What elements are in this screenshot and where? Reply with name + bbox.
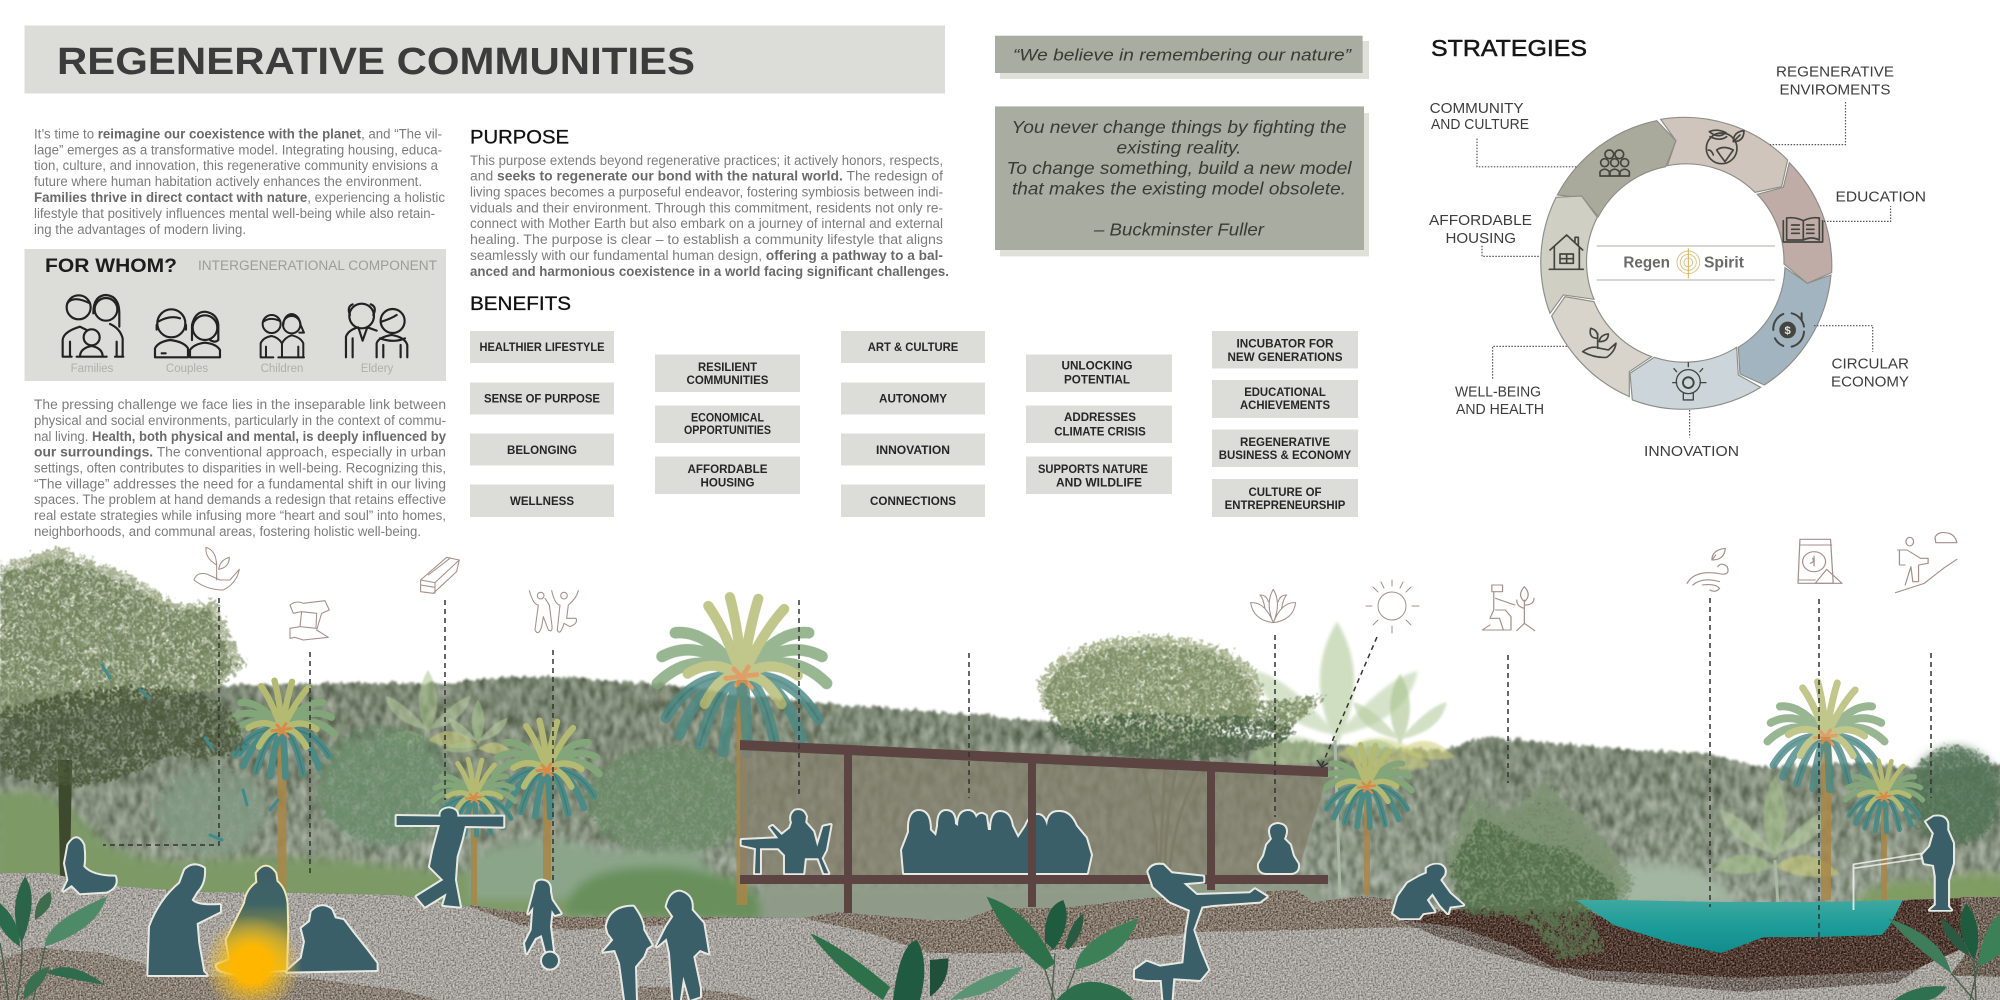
benefits heading: BENEFITS — [470, 293, 571, 315]
benefit tile: innovation — [841, 434, 985, 466]
icon: hand holding sprout — [194, 547, 239, 590]
gravel ground — [0, 873, 2000, 1000]
segment: education — [1757, 163, 1832, 283]
elderly label: Eldery — [361, 363, 394, 375]
strategy labels: COMMUNITY — [1430, 100, 1524, 117]
segment: circular economy — [1738, 268, 1831, 385]
benefit tile: economical opportunities — [655, 406, 800, 443]
benefit tile: economical opportunities: OPPORTUNITIES — [684, 425, 771, 437]
icon: gardener — [1482, 585, 1535, 631]
purpose text block — [470, 153, 949, 279]
wheel centre logo: Regen — [1623, 255, 1670, 272]
for whom heading: FOR WHOM? — [45, 256, 177, 277]
benefit tile: addresses climate crisis: CLIMATE CRISIS — [1054, 426, 1146, 438]
icon: circular dollar — [1773, 313, 1804, 347]
canopy tree behind pergola — [1038, 636, 1325, 868]
benefit tile: innovation: INNOVATION — [876, 445, 950, 457]
purpose text block: viduals and their environment. Through this commitment, residents not only re- — [470, 200, 943, 216]
benefit tile: belonging — [470, 434, 614, 466]
benefit tile: educational achievements — [1212, 380, 1358, 418]
strategy labels: ECONOMY — [1831, 374, 1909, 390]
plants in the soil — [1470, 899, 1605, 960]
quote box: Buckminster Fuller: You never change things by fighting the — [1012, 117, 1347, 137]
challenge text block: physical and social environments, particularly in the context of commu- — [34, 413, 446, 428]
benefit tile: supports nature and wildlife — [1026, 456, 1172, 494]
dashed leader lines — [103, 598, 1931, 955]
benefit tile: healthier lifestyle: HEALTHIER LIFESTYLE — [480, 342, 605, 354]
intro text block — [34, 126, 445, 237]
challenge text block: nal living. Health, both physical and mental, is deeply influenced by — [34, 429, 446, 444]
figure: person carrying log — [397, 808, 503, 907]
benefit tile: affordable housing: AFFORDABLE — [688, 464, 768, 476]
benefit tile: addresses climate crisis — [1026, 406, 1172, 443]
quote box: Buckminster Fuller: existing reality. — [1116, 138, 1242, 158]
benefit tile: resilient communities — [655, 354, 800, 392]
irrigation pole — [1853, 853, 1922, 910]
children figures — [525, 881, 708, 1000]
strategies heading: STRATEGIES — [1431, 35, 1587, 61]
intro text block: tion, culture, and innovation, this regenerative community envisions a — [34, 158, 438, 173]
figure: boy running — [657, 892, 708, 1000]
pergola glass pane — [740, 745, 1328, 875]
intro text block: future where human habitation actively enhances the environment. — [34, 174, 422, 189]
challenge text block: real estate strategies while infusing more “heart and soul” into homes, — [34, 508, 446, 523]
shrub — [1445, 782, 1635, 915]
icon: joined hands — [290, 601, 329, 640]
benefit tile: educational achievements: ACHIEVEMENTS — [1240, 400, 1330, 412]
benefit tile: art and culture — [841, 331, 985, 363]
strategy labels: REGENERATIVE — [1776, 64, 1894, 80]
figure: sitting child — [63, 838, 116, 893]
big tree on the left — [0, 548, 278, 880]
icon: families — [63, 295, 123, 357]
segment: affordable housing — [1541, 196, 1597, 313]
quote box: Buckminster Fuller: To change something, build a new model — [1006, 158, 1353, 178]
lower soil patches — [0, 947, 760, 1000]
brown soil mound — [470, 890, 1500, 965]
purpose text block: seamlessly with our fundamental human design, offering a pathway to a bal- — [470, 248, 943, 263]
intro text block: lifestyle that positively influences mental well-being while also retain- — [34, 206, 435, 221]
foliage: banana plant centre — [810, 897, 1138, 1000]
benefits grid — [470, 331, 1358, 517]
icon: sun — [1366, 580, 1419, 633]
right side figures — [1393, 816, 1953, 918]
figure: person at desk — [742, 810, 831, 873]
segment: regenerative environments — [1661, 117, 1788, 192]
benefit tile: educational achievements: EDUCATIONAL — [1244, 387, 1326, 399]
benefit tile: wellness: WELLNESS — [510, 496, 574, 508]
figure: standing person with pole — [1922, 816, 1953, 910]
benefit tile: economical opportunities: ECONOMICAL — [691, 412, 764, 424]
intro text block: ing the advantages of modern living. — [34, 222, 246, 237]
quote box: remembering our nature — [995, 36, 1369, 79]
benefit tile: incubator for new generations: NEW GENERATIONS — [1228, 352, 1343, 364]
foliage: banana plant right — [1888, 903, 2000, 1000]
pale mid-ground trees and feather palms — [155, 622, 2000, 905]
figure: acrobats — [1135, 865, 1267, 1000]
scene line icons — [194, 533, 1957, 640]
purpose text block: This purpose extends beyond regenerative practices; it actively honors, respects, — [470, 153, 943, 168]
benefit tile: healthier lifestyle — [470, 331, 614, 363]
strategy wheel — [1541, 117, 1832, 409]
pond — [1576, 900, 1903, 953]
quote box: Buckminster Fuller: that makes the existing model obsolete. — [1012, 179, 1346, 199]
benefit tile: culture of entrepreneurship: CULTURE OF — [1248, 487, 1322, 499]
icon: light bulb with gear — [1673, 363, 1706, 400]
icon: lotus — [1251, 589, 1296, 623]
low green bushes — [0, 792, 2000, 925]
strategy labels: CIRCULAR — [1832, 356, 1909, 372]
foliage: banana plant left — [0, 877, 107, 1000]
icon: house — [1549, 235, 1583, 269]
challenge text block: settings, often contributes to disparities in well-being. Recognizing this, — [34, 460, 446, 476]
title banner — [24, 26, 945, 94]
intergenerational subheading: INTERGENERATIONAL COMPONENT — [198, 258, 437, 273]
purpose text block: anced and harmonious coexistence in a world facing significant challenges. — [470, 264, 949, 279]
icon: stacked timber — [421, 557, 459, 593]
dark soil bed — [1395, 897, 2000, 992]
children label: Children — [261, 363, 303, 375]
challenge text block: “The village” addresses the need for a fundamental shift in our living — [34, 476, 446, 492]
purpose text block: living spaces becomes a purposeful endeavor, fostering symbiosis between indi- — [470, 184, 943, 200]
football — [542, 953, 558, 969]
panel: for whom — [24, 249, 446, 381]
benefit tile: autonomy — [841, 382, 985, 414]
icon: hand with sprout — [1583, 328, 1616, 357]
figure: girl running — [603, 907, 652, 1000]
benefit tile: unlocking potential: UNLOCKING — [1062, 361, 1133, 373]
challenge text block: our surroundings. The conventional approach, especially in urban — [34, 444, 446, 460]
challenge text block — [34, 397, 446, 539]
quote box: remembering our nature: “We believe in remembering our nature” — [1013, 46, 1353, 64]
campfire glow — [202, 915, 302, 1000]
arrow tip from sun — [1317, 760, 1328, 767]
strategy labels: AND HEALTH — [1456, 401, 1544, 418]
wheel centre logo: Spirit — [1704, 255, 1744, 272]
icon: couples — [155, 309, 220, 357]
challenge text block: The pressing challenge we face lies in the inseparable link between — [34, 397, 446, 412]
forested hills — [0, 677, 2000, 950]
figure: person beside fire — [217, 867, 287, 973]
challenge text block: spaces. The problem at hand demands a redesign that retains effective — [34, 492, 446, 507]
segment: well-being and health — [1552, 297, 1652, 397]
icon: dancing people — [529, 591, 578, 633]
figure: kneeling person — [148, 865, 220, 975]
segment: innovation — [1630, 347, 1761, 409]
figure: hunched person — [287, 906, 377, 972]
benefit tile: incubator for new generations: INCUBATOR FOR — [1236, 339, 1334, 351]
icon: elderly — [346, 304, 407, 357]
intro text block: It’s time to reimagine our coexistence with the planet, and “The vil- — [34, 126, 442, 142]
icon: globe with leaf — [1706, 130, 1744, 164]
benefit tile: belonging: BELONGING — [507, 445, 577, 457]
strategy labels: AND CULTURE — [1431, 116, 1529, 133]
strategy labels: ENVIROMENTS — [1780, 81, 1890, 98]
benefit tile: resilient communities: COMMUNITIES — [686, 375, 769, 387]
strategy labels: WELL-BEING — [1455, 384, 1541, 400]
strategy labels: INNOVATION — [1644, 443, 1739, 460]
figure: seated group — [902, 811, 1091, 873]
benefit tile: sense of purpose — [470, 382, 614, 414]
strategy labels: EDUCATION — [1836, 188, 1926, 206]
benefit tile: addresses climate crisis: ADDRESSES — [1064, 412, 1136, 424]
icon: soil bag — [1798, 539, 1842, 583]
pergola frame — [740, 740, 1328, 913]
benefit tile: art and culture: ART & CULTURE — [868, 342, 959, 354]
benefit tile: regenerative business and economy: REGENERATIVE — [1240, 437, 1330, 449]
benefit tile: resilient communities: RESILIENT — [698, 362, 757, 374]
benefit tile: supports nature and wildlife: SUPPORTS NATURE — [1038, 464, 1148, 476]
benefit tile: culture of entrepreneurship: ENTREPRENEURSHIP — [1225, 500, 1346, 512]
benefit tile: connections — [841, 484, 985, 517]
figure: meditating person — [1259, 824, 1298, 873]
teal flecks near tree — [102, 665, 278, 840]
icon: open book — [1783, 218, 1823, 242]
benefit tile: incubator for new generations — [1212, 331, 1358, 368]
icon: wind and leaf — [1687, 548, 1728, 591]
title text: REGENERATIVE COMMUNITIES — [57, 41, 695, 83]
strategy labels — [1429, 64, 1926, 460]
couples label: Couples — [166, 363, 208, 375]
benefit tile: sense of purpose: SENSE OF PURPOSE — [484, 394, 600, 406]
families label: Families — [71, 363, 114, 375]
wheel centre logo — [1597, 246, 1775, 280]
figure: gardener — [1393, 865, 1463, 918]
leader lines for strategies — [1477, 102, 1891, 438]
segment: community and culture — [1557, 121, 1676, 217]
scene: landscape cross-section — [0, 548, 2000, 1000]
strategy labels: HOUSING — [1446, 230, 1516, 247]
challenge text block: neighborhoods, and communal areas, fostering holistic well-being. — [34, 524, 421, 539]
benefit tile: connections: CONNECTIONS — [870, 496, 956, 508]
icon: hiker — [1896, 533, 1957, 593]
benefit tile: affordable housing — [655, 456, 800, 494]
benefit tile: unlocking potential — [1026, 354, 1172, 392]
figures under the pergola — [742, 810, 1298, 873]
benefit tile: regenerative business and economy: BUSINESS & ECONOMY — [1219, 450, 1352, 462]
mid palms — [230, 597, 1923, 905]
purpose text block: connect with Mother Earth but also embark on a journey of internal and external — [470, 216, 943, 231]
purpose heading: PURPOSE — [470, 126, 569, 148]
purpose text block: and seeks to regenerate our bond with the natural world. The redesign of — [470, 168, 943, 184]
icon: people group — [1600, 150, 1629, 176]
benefit tile: autonomy: AUTONOMY — [879, 394, 947, 406]
benefit tile: supports nature and wildlife: AND WILDLIFE — [1056, 478, 1142, 490]
figures around the fire — [63, 808, 503, 975]
figure: child with ball — [525, 881, 561, 953]
benefit tile: affordable housing: HOUSING — [700, 478, 755, 490]
benefit tile: regenerative business and economy — [1212, 430, 1358, 467]
purpose text block: healing. The purpose is clear – to establish a community lifestyle that aligns — [470, 232, 943, 247]
benefit tile: culture of entrepreneurship — [1212, 479, 1358, 517]
strategy labels: AFFORDABLE — [1429, 212, 1532, 229]
intro text block: lage” emerges as a transformative model. Integrating housing, educa- — [34, 142, 442, 158]
benefit tile: wellness — [470, 484, 614, 517]
quote box: Buckminster Fuller: – Buckminster Fuller — [1093, 219, 1265, 239]
quote box: Buckminster Fuller — [995, 106, 1369, 256]
icon: circular dollar: $ — [1784, 325, 1791, 337]
intro text block: Families thrive in direct contact with nature, experiencing a holistic — [34, 190, 445, 205]
icon: children — [261, 314, 304, 357]
benefit tile: unlocking potential: POTENTIAL — [1064, 375, 1130, 387]
